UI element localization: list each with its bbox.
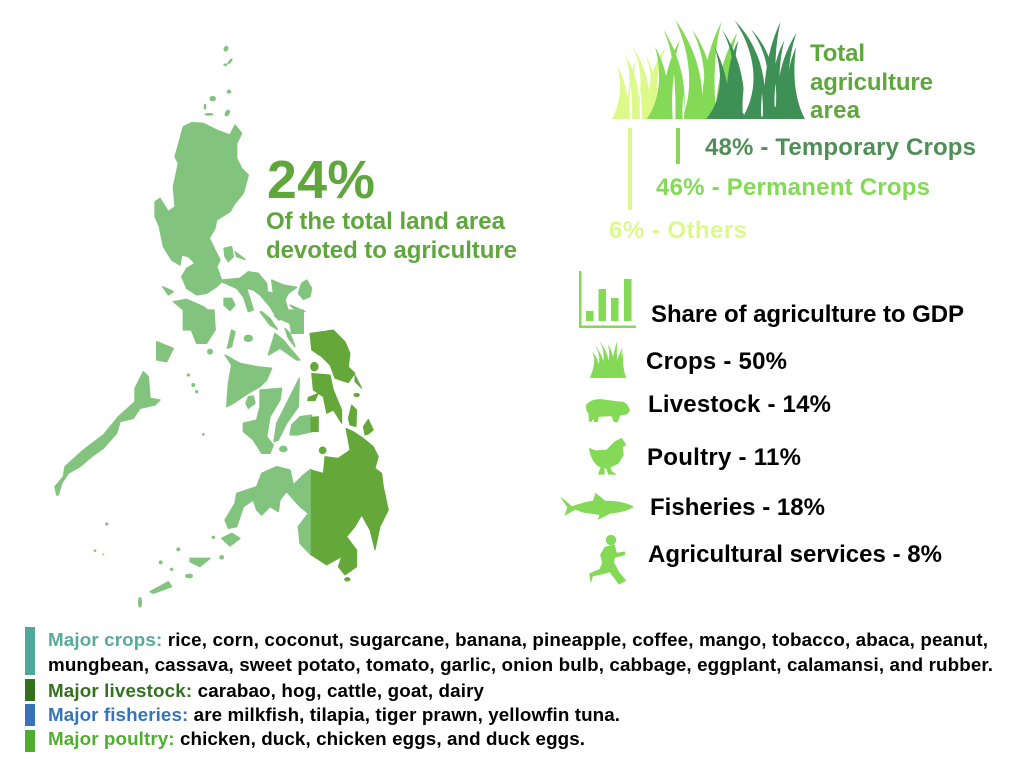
label: fisheries: Fisheries - 18% — [650, 494, 825, 521]
map: Philippines — [55, 46, 388, 607]
map: Visayas, Palawan, western Mindanao (light green) — [55, 310, 312, 607]
label: crops: Crops - 50% — [646, 348, 787, 375]
marker: permanent crops bar — [676, 128, 680, 164]
icon: runner — [590, 535, 626, 584]
headline: 24% statistic: devoted to agriculture — [266, 237, 517, 264]
label: others: 6% - Others — [609, 217, 747, 244]
icon: bar chart — [579, 271, 636, 328]
icon: shark — [561, 493, 633, 519]
headline: 24% statistic: 24% — [267, 151, 375, 210]
map: Luzon and northern islands (light green) — [155, 46, 312, 330]
label: livestock: Livestock - 14% — [648, 391, 831, 418]
map: eastern Visayas and eastern Mindanao (dark green) — [308, 330, 388, 581]
icon: crops grass — [590, 342, 626, 378]
legend: major fisheries: Major fisheries: are milkfish, tilapia, tiger prawn, yellowfin tuna. — [48, 704, 620, 725]
legend: major crops: Major crops: rice, corn, coconut, sugarcane, banana, pineapple, coffee, mango, tobacco, abaca, peanut, — [48, 629, 988, 650]
label: poultry: Poultry - 11% — [647, 444, 801, 471]
heading: total agriculture area — [810, 40, 933, 124]
marker: others bar — [628, 128, 632, 210]
legend: major crops — [25, 627, 993, 675]
heading: total agriculture area: Total — [810, 40, 865, 67]
legend: major crops: mungbean, cassava, sweet potato, tomato, garlic, onion bulb, cabbage, eggplant, calamansi, and rubber. — [48, 654, 993, 675]
legend: major poultry: Major poultry: chicken, duck, chicken eggs, and duck eggs. — [48, 728, 585, 749]
heading: total agriculture area: agriculture — [810, 69, 933, 96]
icon: chicken — [589, 438, 626, 474]
label: temporary crops: 48% - Temporary Crops — [705, 134, 976, 161]
label: agricultural services: Agricultural services - 8% — [648, 541, 942, 568]
heading: share of agriculture to GDP: Share of agriculture to GDP — [651, 301, 964, 328]
heading: total agriculture area: area — [810, 97, 861, 124]
label: permanent crops: 46% - Permanent Crops — [656, 174, 930, 201]
icon: pig — [586, 400, 630, 422]
headline: 24% statistic: Of the total land area — [266, 208, 506, 235]
headline: 24% statistic — [266, 151, 517, 264]
legend: major livestock: Major livestock: carabao, hog, cattle, goat, dairy — [48, 680, 485, 701]
icon: grass total agriculture area — [612, 20, 805, 119]
